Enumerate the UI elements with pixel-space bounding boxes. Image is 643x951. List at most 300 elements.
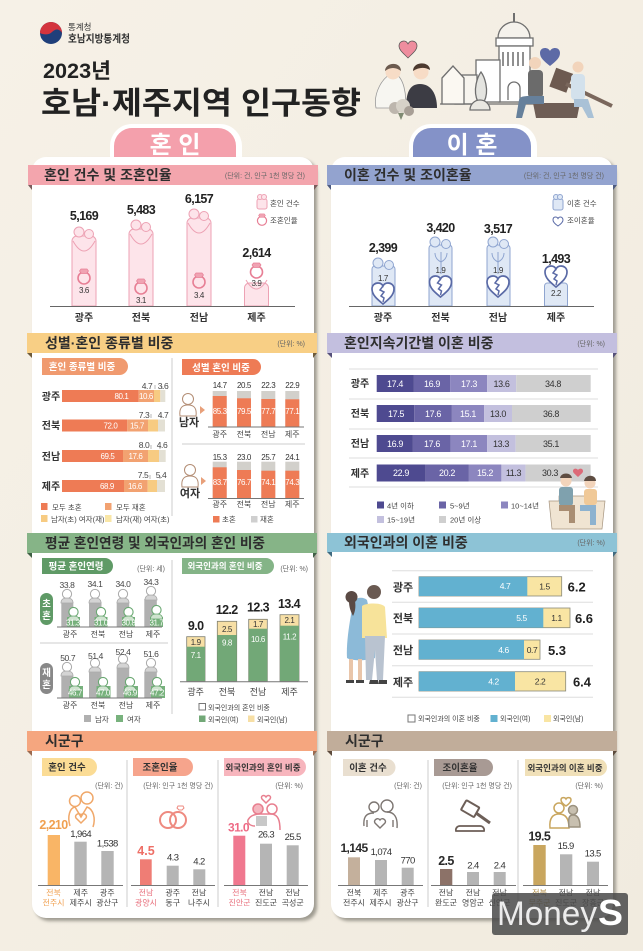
legend: divorce: 조이혼율: [567, 215, 595, 225]
chart: divorce by marriage duration: 광주: [351, 378, 369, 390]
chart: divorce count by district: 1,074: [371, 847, 392, 858]
chart: remarriage age: 47.2: [150, 688, 165, 698]
chart: remarriage age: 46.9: [123, 688, 138, 698]
legend: foreign marriage: 외국인과의 혼인 비중: [208, 703, 270, 712]
chart: marriage count by district: 제주: [73, 888, 88, 898]
chart: foreign divorce by district: 15.9: [558, 841, 574, 852]
chart: female first/re-marriage share: 전남: [261, 499, 276, 509]
chart: divorce by marriage duration: 15.1: [460, 409, 476, 419]
chart: marriage count and crude rate: 3.1: [136, 296, 147, 305]
legend: marriage type: 모두 재혼: [116, 502, 146, 512]
logo and organisation name: 호남지방통계청: [68, 32, 130, 45]
subheading: average age: 평균 혼인연령: [48, 560, 104, 572]
chart: foreign divorce share: 0.7: [527, 645, 538, 655]
chart: male first/re-marriage share: 전북: [237, 429, 251, 439]
bar: Jeonnam marriages: [187, 209, 211, 306]
chart: remarriage age: 전남: [119, 700, 134, 710]
heading: divorce count: 이혼 건수 및 조이혼율: [344, 167, 472, 183]
chart: foreign divorce by district: 장흥군: [582, 898, 604, 908]
legend: duration: 5~9년: [450, 500, 470, 510]
icon: broken heart blue: [540, 48, 560, 66]
chart: female first/re-marriage share: [208, 453, 304, 509]
chart: foreign marriage by district: 26.3: [258, 830, 274, 840]
chart: foreign marriage by district: [224, 820, 308, 908]
chart: crude marriage rate by district: 나주시: [188, 898, 210, 908]
legend: divorce: 이혼 건수: [567, 198, 597, 208]
chart: divorce by marriage duration: 17.6: [425, 409, 441, 419]
chart: foreign divorce share: 4.6: [498, 645, 509, 655]
subheading: marriage type share: [42, 358, 128, 375]
chart: marriage count by district: 제주시: [70, 898, 92, 908]
chart: male first/re-marriage share: 14.7: [213, 381, 228, 390]
chart: divorce by marriage duration: 11.3: [506, 468, 522, 478]
chart: first marriage age: 34.1: [88, 579, 103, 589]
chart: divorce by marriage duration: 13.3: [493, 439, 509, 449]
chart: divorce by marriage duration: 35.1: [543, 439, 559, 449]
bar: Jeju divorces: [544, 283, 568, 306]
stacked bars: marriage type: 8.0: [139, 440, 150, 450]
subheading: foreign marriage: [182, 558, 274, 574]
chart: first marriage age: 34.0: [116, 579, 131, 589]
chart: female first/re-marriage share: 제주: [285, 500, 300, 509]
chart: foreign divorce by district: 13.5: [585, 848, 601, 860]
legend: foreign divorce: 외국인(여): [500, 714, 530, 723]
stacked bars: marriage type: 15.7: [130, 422, 145, 430]
legend: foreign marriage: 외국인(남): [257, 715, 287, 724]
chart: male first/re-marriage share: [208, 381, 304, 439]
chart: foreign marriage share: 9.0: [188, 619, 204, 633]
chart: foreign marriage share: 1.7: [253, 620, 264, 629]
chart: divorce by marriage duration: 17.3: [461, 379, 477, 389]
chart: foreign divorce share: 1.5: [539, 582, 550, 592]
chart: foreign marriage by district: 31.0: [228, 820, 250, 834]
legend: marriage type: 남자(초) 여자(재): [51, 514, 105, 524]
chart: male first/re-marriage share: 79.5: [237, 407, 252, 416]
chart: crude divorce rate by district: 완도군: [435, 898, 457, 908]
heading: marriage count: 혼인 건수 및 조혼인율: [44, 167, 172, 183]
chart: crude divorce rate by district: 영암군: [462, 898, 484, 908]
legend: foreign marriage: [199, 703, 287, 724]
chart: male first/re-marriage share: 77.1: [285, 407, 300, 416]
stacked bars: marriage type: 3.6: [158, 381, 169, 391]
chart: foreign marriage by district: 진도군: [255, 898, 277, 908]
chart: foreign marriage share: 7.1: [191, 651, 202, 660]
chart: first marriage age: [57, 577, 164, 639]
chart: foreign divorce share: 6.4: [573, 674, 592, 690]
subheading: gender share: [182, 359, 261, 375]
subheading: crude divorce rate by district: 조이혼율: [443, 762, 478, 774]
value labels: 5,483: [127, 203, 156, 217]
subheading: divorce count by district: 이혼 건수: [349, 762, 387, 774]
icon: pink heart: [399, 41, 417, 58]
legend: marriage: 조혼인율: [270, 215, 298, 225]
legend: age: 남자: [95, 715, 109, 724]
legend: marriage type: 모두 초혼: [52, 502, 82, 512]
illustration: wedding couple: [375, 63, 437, 108]
chart: foreign marriage by district: 진안군: [228, 898, 251, 908]
bar: Gwangju divorces: [372, 258, 395, 306]
title: 2023년: [43, 60, 111, 83]
subheading: crude marriage rate by district: [133, 758, 193, 776]
chart: divorce count and crude rate: 전북: [431, 312, 450, 324]
stacked bars: marriage type: 전남: [42, 450, 60, 463]
subheading: divorce count by district: [343, 759, 396, 776]
legend: marriage: [257, 194, 300, 225]
chart: foreign divorce by district: 전남: [559, 888, 574, 898]
subheading: foreign divorce by district: 외국인과의 이혼 비중: [527, 763, 603, 773]
legend: first/re-marriage: [213, 514, 274, 524]
chart: divorce count by district: 전주시: [343, 898, 365, 908]
subheading: marriage count by district: [42, 758, 97, 776]
stacked bars: marriage type: 10.6: [139, 392, 154, 401]
watermark: MoneyS: [492, 892, 628, 935]
chart: crude divorce rate by district: 2.5: [438, 854, 454, 868]
chart: remarriage age: 광주: [63, 700, 77, 710]
chart: foreign marriage by district: 25.5: [285, 832, 301, 843]
heading: districts (marriage): [27, 731, 317, 756]
heading: foreign divorce: [327, 533, 617, 557]
panel: marriage: (단위: 인구 1천 명당 건): [143, 781, 213, 790]
chart: marriage count by district: 1,964: [70, 829, 91, 840]
illustration: seated man: [516, 57, 544, 118]
chart: divorce by marriage duration: 17.6: [424, 439, 440, 449]
chart: female first/re-marriage share: 15.3: [213, 453, 228, 462]
heading: duration share: (단위: %): [577, 339, 605, 348]
panel: marriage: (단위: 건): [95, 781, 123, 790]
chart: male first/re-marriage share: 22.9: [285, 381, 300, 390]
legend: first/re-marriage: 초혼: [222, 514, 236, 524]
chart: marriage count and crude rate: 3.6: [79, 286, 90, 295]
label: remarriage: 혼: [42, 679, 51, 691]
chart: foreign divorce share: 5.5: [516, 613, 527, 623]
icon: couple with broken heart: [364, 800, 397, 828]
chart: foreign divorce by district: 전남: [586, 888, 601, 898]
chart: divorce count by district: 광주: [400, 888, 415, 898]
chart: marriage count by district: [38, 818, 123, 908]
chart: female first/re-marriage share: 83.7: [213, 478, 228, 487]
icon: multicultural couple with heart: [248, 796, 280, 830]
chart: divorce by marriage duration: 17.1: [461, 439, 477, 449]
chart: divorce by marriage duration: 16.9: [424, 379, 440, 389]
chart: divorce count and crude rate: 광주: [374, 312, 392, 324]
bar: Jeju marriages: [244, 280, 268, 306]
heading: districts (divorce): [327, 731, 617, 756]
chart: foreign divorce share: 4.7: [500, 581, 511, 591]
tab: divorce: 이 혼: [447, 132, 497, 159]
chart: marriage count and crude rate: 3.9: [252, 279, 262, 288]
chart: crude marriage rate by district: 광주: [165, 888, 180, 898]
icon: couple with torn heart: [550, 798, 580, 828]
heading: duration share: 혼인지속기간별 이혼 비중: [344, 335, 494, 351]
subheading: crude marriage rate by district: 조혼인율: [143, 762, 178, 774]
legend: duration: 20년 이상: [450, 514, 481, 524]
chart: divorce count and crude rate: 3,517: [484, 222, 513, 236]
title: [41, 60, 361, 121]
chart: divorce count and crude rate: 1.9: [493, 266, 504, 275]
chart: marriage count and crude rate: 광주: [75, 312, 93, 324]
chart: male first/re-marriage share: 22.3: [261, 381, 276, 390]
chart: foreign divorce share: 2.2: [535, 676, 546, 686]
chart: foreign divorce share: 전북: [393, 612, 413, 625]
stacked bars: marriage type: 17.6: [129, 452, 143, 461]
heading: divorce count: [327, 165, 617, 190]
broken hearts: [372, 266, 567, 304]
chart: first marriage age: 34.3: [144, 577, 159, 587]
chart: first marriage age: 31.0: [94, 618, 109, 628]
chart: female first/re-marriage share: 광주: [212, 499, 227, 509]
stacked bars: marriage type: 제주: [42, 480, 60, 493]
chart: divorce by marriage duration: 13.6: [494, 379, 510, 389]
chart: first marriage age: 전남: [119, 629, 134, 639]
stacked bars: marriage type: 4.7: [158, 410, 169, 420]
heading: marriage count: [28, 165, 318, 190]
value labels: [70, 192, 271, 260]
chart: crude marriage rate by district: [131, 844, 215, 908]
chart: divorce by marriage duration: 15.2: [477, 468, 493, 478]
legend: foreign divorce: 외국인과의 이혼 비중: [418, 714, 480, 723]
panel: divorce: [327, 157, 617, 921]
bar: Jeonnam divorces: [487, 237, 510, 306]
stacked bars: marriage type: 7.3: [139, 410, 150, 420]
heading: gender and marriage type: [27, 333, 317, 358]
legend: duration: 15~19년: [387, 514, 415, 524]
chart: remarriage age: 52.4: [116, 647, 131, 657]
chart: remarriage age: 47.0: [96, 688, 111, 698]
bar: Jeonbuk marriages: [129, 220, 153, 306]
chart: marriage count by district: 광산구: [96, 898, 118, 908]
chart: foreign marriage share: 전북: [219, 687, 235, 697]
bar: Jeonbuk divorces: [429, 237, 452, 306]
panel: divorce: (단위: %): [575, 781, 603, 790]
chart: remarriage age: 46.7: [68, 688, 83, 698]
chart: remarriage age: 전북: [91, 700, 105, 710]
chart: marriage count by district: 2,210: [39, 818, 68, 832]
chart: male first/re-marriage share: 제주: [285, 430, 300, 439]
chart: foreign divorce share: 6.2: [568, 580, 586, 594]
chart: foreign marriage share: 13.4: [278, 597, 301, 611]
chart: crude marriage rate by district: 4.2: [193, 856, 205, 868]
stacked bars: marriage type: 7.5: [138, 470, 149, 480]
logo and organisation name: 통계청: [68, 22, 91, 32]
chart: crude marriage rate by district: 동구: [165, 898, 180, 908]
icon: gavel: [456, 800, 490, 831]
chart: foreign marriage share: 2.1: [285, 616, 295, 625]
panel: marriage: [27, 157, 318, 921]
chart: crude marriage rate by district: 4.3: [167, 852, 179, 864]
chart: foreign divorce by district: [523, 830, 608, 908]
chart: marriage count by district: 1,538: [97, 838, 118, 850]
chart: female first/re-marriage share: 76.7: [237, 478, 252, 487]
chart: foreign divorce share: 전남: [393, 644, 413, 657]
heading: average age and foreign marriage: 평균 혼인연령 및 외국인과의 혼인 비중: [45, 535, 265, 551]
chart: divorce count and crude rate: 1.9: [436, 266, 446, 275]
watermark: MoneyS: S: [598, 892, 623, 933]
chart: crude divorce rate by district: 전남: [439, 888, 454, 898]
chart: first marriage age: 33.8: [60, 580, 75, 590]
legend: duration: 10~14년: [511, 500, 539, 510]
subheading: foreign marriage: 외국인과의 혼인 비중: [187, 561, 263, 571]
chart: foreign marriage share: 1.9: [191, 638, 202, 647]
chart: divorce count and crude rate: 2,399: [369, 241, 398, 255]
subheading: foreign marriage by district: 외국인과의 혼인 비중: [225, 762, 301, 772]
chart: foreign divorce share: 제주: [393, 675, 413, 689]
label: remarriage: [40, 663, 53, 694]
chart: crude divorce rate by district: 전남: [466, 888, 481, 898]
subheading: marriage count by district: 혼인 건수: [48, 762, 86, 774]
chart: divorce count by district: [338, 841, 423, 908]
chart: crude divorce rate by district: 신안군: [488, 898, 511, 908]
chart: divorce count by district: 제주시: [369, 898, 392, 908]
chart: divorce by marriage duration: 제주: [351, 467, 369, 480]
chart: female first/re-marriage share: 25.7: [261, 453, 276, 462]
tab: marriage: 혼 인: [150, 132, 200, 159]
tab: marriage: [110, 124, 242, 160]
chart: crude marriage rate by district: 광양시: [135, 898, 157, 908]
subheading: marriage type share: 혼인 종류별 비중: [49, 361, 115, 373]
legend: divorce: [553, 194, 597, 226]
stacked bars: marriage type: 68.9: [100, 482, 115, 491]
heading: districts (divorce): 시군구: [345, 733, 384, 749]
label: first marriage: 혼: [42, 610, 51, 622]
chart: foreign marriage share: 전남: [250, 687, 266, 697]
chart: foreign marriage share: 10.6: [251, 635, 266, 644]
icon: man: [179, 394, 205, 429]
legend: foreign marriage: 외국인(여): [208, 715, 238, 724]
chart: foreign marriage share: 광주: [187, 686, 204, 697]
chart: marriage count and crude rate: 전남: [190, 311, 208, 324]
legend: duration: 4년 이하: [387, 500, 414, 510]
chart: marriage count by district: 광주: [100, 888, 115, 898]
chart: marriage count and crude rate: [50, 192, 295, 324]
rings: [78, 263, 262, 294]
illustration: couple from behind: [346, 585, 387, 684]
label: first marriage: 초: [42, 599, 51, 610]
chart: male first/re-marriage share: 77.7: [261, 407, 276, 416]
chart: divorce count and crude rate: 전남: [489, 311, 507, 324]
legend: marriage type: 남자(재) 여자(초): [116, 514, 170, 524]
chart: remarriage age: [57, 647, 165, 710]
heading: foreign divorce: (단위: %): [577, 538, 605, 547]
chart: divorce by marriage duration: 30.3: [542, 468, 558, 478]
chart: divorce count and crude rate: 1.7: [378, 274, 389, 283]
stacked bars: marriage type: 5.4: [156, 470, 167, 480]
tab: divorce: [409, 124, 537, 160]
chart: foreign marriage share: 12.3: [247, 600, 270, 614]
chart: divorce count and crude rate: 제주: [547, 311, 565, 324]
chart: divorce by marriage duration: 20.2: [439, 468, 455, 478]
chart: crude divorce rate by district: 2.4: [494, 860, 506, 872]
chart: crude marriage rate by district: 전남: [192, 888, 207, 898]
panel: marriage: (단위: %): [275, 781, 303, 790]
chart: male first/re-marriage share: 20.5: [237, 381, 252, 390]
chart: first marriage age: 전북: [91, 629, 105, 639]
chart: marriage count and crude rate: 전북: [132, 312, 150, 324]
chart: male first/re-marriage share: 85.3: [213, 407, 228, 416]
stacked bars: marriage type: 69.5: [101, 452, 115, 461]
watermark: MoneyS: Money: [497, 895, 597, 933]
chart: remarriage age: 50.7: [60, 653, 76, 663]
heading: gender and marriage type: 성별·혼인 종류별 비중: [45, 335, 173, 351]
stacked bars: marriage type: 4.7: [142, 381, 153, 391]
value labels: 6,157: [185, 192, 214, 206]
chart: first marriage age: 광주: [63, 629, 77, 639]
icon: man: 남자: [179, 416, 199, 429]
chart: first marriage age: 31.7: [150, 618, 164, 628]
chart: divorce by marriage duration: 22.9: [393, 468, 409, 478]
value labels: 2,614: [242, 246, 271, 260]
heading: foreign divorce: 외국인과의 이혼 비중: [344, 534, 468, 550]
panel: marriage: (단위: 세): [137, 564, 165, 573]
heading: marriage count: (단위: 건, 인구 1천 명당 건): [225, 171, 305, 180]
chart: divorce by marriage duration: 36.8: [543, 409, 559, 419]
chart: female first/re-marriage share: 74.3: [285, 478, 300, 487]
title: 호남·제주지역 인구동향: [41, 86, 361, 121]
chart: female first/re-marriage share: 전북: [237, 499, 251, 509]
legend: first/re-marriage: 재혼: [260, 514, 274, 524]
chart: divorce by marriage duration: [349, 369, 598, 487]
chart: first marriage age: 제주: [146, 630, 160, 639]
stacked bars: marriage type: 16.6: [128, 482, 143, 491]
subheading: crude divorce rate by district: [434, 759, 493, 776]
chart: foreign divorce share: 4.2: [488, 676, 499, 686]
chart: divorce count by district: 770: [401, 856, 415, 866]
stacked bars: marriage type: 광주: [42, 391, 60, 403]
chart: remarriage age: 51.4: [88, 651, 104, 661]
chart: foreign marriage by district: 전북: [232, 888, 247, 898]
chart: divorce by marriage duration: 16.9: [387, 439, 403, 449]
heading: divorce count: (단위: 건, 인구 1천 명당 건): [524, 171, 604, 180]
chart: divorce by marriage duration: 17.4: [387, 379, 403, 389]
legend: duration: [377, 500, 539, 524]
chart: marriage count by district: 전주시: [42, 898, 65, 908]
heading: average age and foreign marriage: [27, 533, 317, 558]
icon: couple with heart: [69, 792, 94, 827]
illustration: couple on sofa: [549, 469, 605, 529]
stacked bars: marriage type: 전북: [42, 420, 60, 432]
logo and organisation name: [40, 22, 130, 45]
icon: woman: [180, 464, 206, 500]
chart: divorce count by district: 전북: [347, 888, 361, 898]
legend: age: [84, 714, 141, 724]
chart: foreign divorce share: [392, 571, 593, 697]
chart: divorce count by district: 광산구: [396, 898, 419, 908]
value labels: 5,169: [70, 209, 99, 223]
chart: marriage count and crude rate: 제주: [247, 311, 266, 324]
chart: first marriage age: 30.8: [122, 618, 136, 628]
subheading: gender share: 성별 혼인 비중: [192, 362, 250, 374]
chart: divorce by marriage duration: 13.0: [490, 409, 506, 419]
icon: wedding rings: [160, 806, 186, 828]
chart: divorce count and crude rate: 2.2: [551, 289, 562, 298]
legend: foreign divorce: 외국인(남): [553, 714, 583, 723]
subheading: foreign marriage by district: [224, 758, 306, 776]
chart: male first/re-marriage share: 전남: [261, 429, 276, 439]
chart: foreign marriage share: 11.2: [283, 632, 297, 642]
chart: foreign divorce share: 5.3: [548, 643, 566, 658]
chart: remarriage age: 제주: [146, 701, 160, 710]
chart: crude divorce rate by district: 2.4: [467, 860, 479, 872]
header illustration: wedding couple, city hall, divorcing couple and gavel: [375, 13, 612, 120]
heading: gender and marriage type: (단위: %): [277, 339, 305, 348]
chart: marriage count and crude rate: 3.4: [194, 291, 205, 300]
chart: male first/re-marriage share: 광주: [212, 429, 227, 439]
chart: foreign divorce share: 6.6: [575, 611, 593, 626]
panel: divorce: (단위: 건): [394, 781, 422, 790]
chart: female first/re-marriage share: 23.0: [237, 453, 252, 462]
chart: foreign marriage by district: 전남: [259, 888, 274, 898]
subheading: average age: [42, 558, 113, 574]
chart: foreign divorce by district: 진도군: [555, 898, 577, 908]
